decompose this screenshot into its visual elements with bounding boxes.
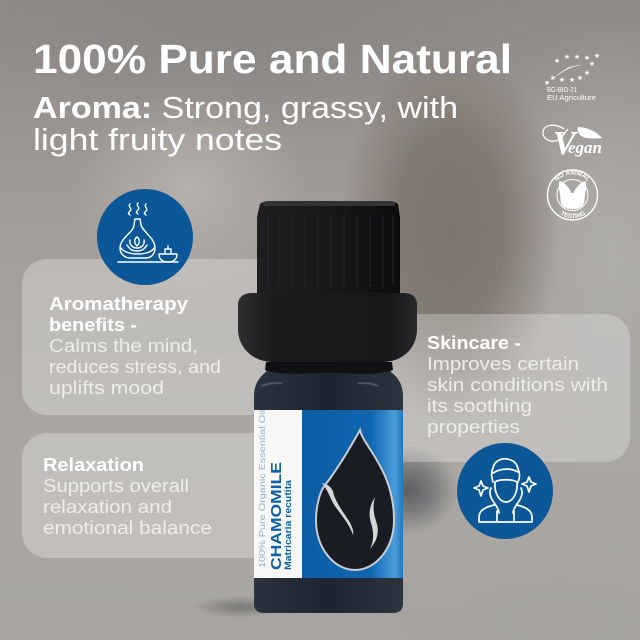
icon: EU organic leaf: BG-BIO-21 <box>547 85 577 94</box>
panel: relaxation <box>22 433 282 558</box>
label white strip with text: Matricaria recutita <box>283 479 293 570</box>
label blue panel <box>302 410 403 578</box>
panel: skincare: skin conditions with <box>427 374 608 395</box>
icon: EU organic leaf: ★ <box>574 53 580 61</box>
icon: woman with towel and sparkles <box>457 443 553 539</box>
panel: skincare: properties <box>427 416 520 437</box>
panel: aromatherapy benefits: benefits - <box>49 314 137 335</box>
subtitle: aroma description <box>33 90 458 157</box>
icon: no animal testing badge: NO ANIMAL <box>554 170 589 182</box>
panel: skincare: its soothing <box>427 395 532 416</box>
label white strip with text: CHAMOMILE <box>269 462 285 570</box>
icon: EU organic leaf: ★ <box>550 74 556 82</box>
icon: EU organic leaf: ★ <box>584 54 590 62</box>
label white strip with text <box>254 410 302 578</box>
icon: EU organic leaf: ★ <box>594 52 600 60</box>
panel: relaxation: Supports overall <box>43 475 189 496</box>
title: 100% Pure and Natural <box>33 36 512 82</box>
panel: aromatherapy benefits: Aromatherapy <box>49 293 189 314</box>
panel: aromatherapy benefits <box>22 259 282 415</box>
icon: no animal testing badge: TESTING <box>562 210 586 218</box>
dropper collar <box>238 293 417 362</box>
icon: vegan logo: V <box>553 125 578 162</box>
icon: EU organic leaf: EU Agriculture <box>547 93 596 102</box>
icon: EU organic leaf <box>544 52 600 102</box>
subtitle: aroma description: Aroma: Strong, grassy, with <box>33 90 458 125</box>
bottle cap <box>257 201 400 295</box>
icon: EU organic leaf: ★ <box>554 57 560 65</box>
panel: aromatherapy benefits: Calms the mind, <box>49 335 198 356</box>
icon: vegan logo: egan <box>568 138 602 157</box>
icon: EU organic leaf: ★ <box>584 69 590 77</box>
panel: aromatherapy benefits: uplifts mood <box>49 377 164 398</box>
panel: relaxation: emotional balance <box>43 517 212 538</box>
panel: aromatherapy benefits: reduces stress, and <box>49 356 221 377</box>
bottle shadow <box>194 596 286 618</box>
panel: skincare <box>360 314 630 462</box>
icon: EU organic leaf: ★ <box>564 53 570 61</box>
drop logo <box>316 430 394 570</box>
icon: EU organic leaf: ★ <box>569 76 575 84</box>
icon: vegan logo <box>543 125 602 162</box>
panel: relaxation: Relaxation <box>43 454 144 475</box>
icon: EU organic leaf: ★ <box>589 60 595 68</box>
icon: EU organic leaf: ★ <box>559 76 565 84</box>
icon: EU organic leaf: ★ <box>577 74 583 82</box>
bottle body <box>254 362 403 613</box>
panel: skincare: Skincare - <box>427 332 521 353</box>
panel: relaxation: relaxation and <box>43 496 172 517</box>
bottle <box>238 201 417 613</box>
subtitle: aroma description: light fruity notes <box>33 122 282 157</box>
panel: skincare: Improves certain <box>427 353 579 374</box>
icon: no animal testing badge <box>546 169 598 221</box>
label white strip with text: 100% Pure Organic Essential Oil <box>257 410 267 568</box>
icon: EU organic leaf: ★ <box>544 79 550 87</box>
icon: aroma diffuser <box>97 189 193 285</box>
